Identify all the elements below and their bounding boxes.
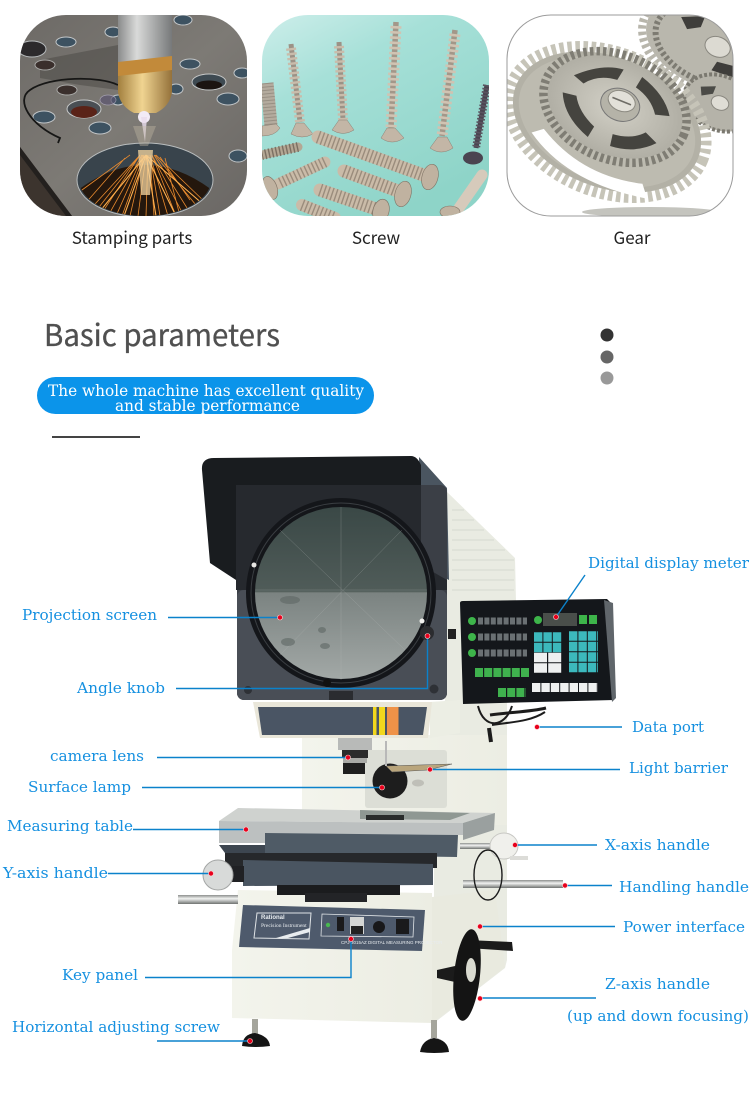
knob: [448, 629, 456, 639]
hood inner: [202, 456, 421, 580]
callout: y-axis handle: Y-axis handle: [2, 864, 108, 882]
screen ring: [246, 498, 436, 688]
column: [302, 735, 507, 825]
key panel: Rational: [261, 915, 285, 921]
callout: light barrier: [428, 759, 729, 777]
light barrier: [386, 764, 452, 772]
callout: camera lens: camera lens: [50, 747, 144, 765]
key panel: [239, 905, 443, 951]
base body: [432, 890, 505, 1023]
photo: gear: [508, 16, 732, 216]
foot left: [242, 1019, 270, 1047]
caption: screw: Screw: [352, 224, 401, 249]
head neck: [430, 700, 460, 738]
callout: light barrier: Light barrier: [629, 759, 729, 777]
callout: surface lamp: Surface lamp: [28, 778, 131, 796]
callout: surface lamp: [28, 778, 384, 796]
photo: screws: [259, 15, 489, 225]
callout: z-axis handle: (up and down focusing): [567, 1007, 749, 1025]
callout: y-axis handle: [2, 864, 214, 882]
callout pill: and stable performance: [115, 396, 300, 415]
callout: key panel: [62, 936, 354, 984]
callout: power interface: [478, 918, 745, 936]
rear housing: [434, 490, 516, 1023]
measuring table: [219, 808, 495, 902]
caption: stamping parts: Stamping parts: [72, 224, 192, 249]
callout: data port: [534, 718, 704, 736]
handwheel: [437, 928, 513, 1022]
machine: profile projector: [178, 456, 616, 1053]
callout: horizontal adjusting screw: Horizontal adjusting screw: [12, 1018, 220, 1036]
callout: measuring table: [7, 817, 248, 835]
callout: digital display meter: [554, 554, 750, 620]
photo border: gear: [507, 15, 733, 216]
lens: [338, 738, 372, 774]
Y-axis handle: [178, 860, 244, 904]
callout: handling handle: Handling handle: [619, 878, 749, 896]
callout: camera lens: [50, 747, 350, 765]
handling handle: [463, 850, 563, 900]
projection screen: [255, 507, 427, 679]
callout: projection screen: Projection screen: [22, 606, 157, 624]
head body: [237, 485, 447, 700]
callout: data port: Data port: [632, 718, 704, 736]
callout pill: The whole machine has excellent quality: [48, 381, 364, 400]
callout: projection screen: [22, 606, 282, 624]
surface lamp: [372, 764, 408, 798]
key panel: Precision Instrument: [261, 923, 307, 929]
callout: digital display meter: Digital display meter: [588, 554, 750, 572]
callout: power interface: Power interface: [623, 918, 745, 936]
callout: angle knob: [76, 634, 430, 697]
callout: x-axis handle: X-axis handle: [605, 836, 710, 854]
callout: angle knob: Angle knob: [76, 679, 165, 697]
cables: [478, 706, 546, 742]
key panel: CPJ-3015AZ DIGITAL MEASURING PROJECTOR: [341, 940, 443, 945]
callout: handling handle: [562, 878, 749, 896]
callout: z-axis handle: [478, 975, 749, 1025]
callout: x-axis handle: [512, 836, 710, 854]
callout: horizontal adjusting screw: [12, 1018, 252, 1044]
X-axis handle: [460, 833, 528, 860]
callout pill: [37, 377, 374, 415]
callout: key panel: Key panel: [62, 966, 138, 984]
callout: z-axis handle: Z-axis handle: [605, 975, 710, 993]
photo: stamping parts: [18, 15, 250, 217]
digital display meter: [460, 599, 616, 704]
side hood panel: [419, 457, 449, 580]
name plate: [253, 702, 432, 738]
caption: gear: Gear: [613, 224, 651, 249]
heading: Basic parameters: [44, 311, 280, 355]
callout: measuring table: Measuring table: [7, 817, 133, 835]
decorative dots: [600, 328, 614, 384]
foot right: [420, 1020, 449, 1053]
